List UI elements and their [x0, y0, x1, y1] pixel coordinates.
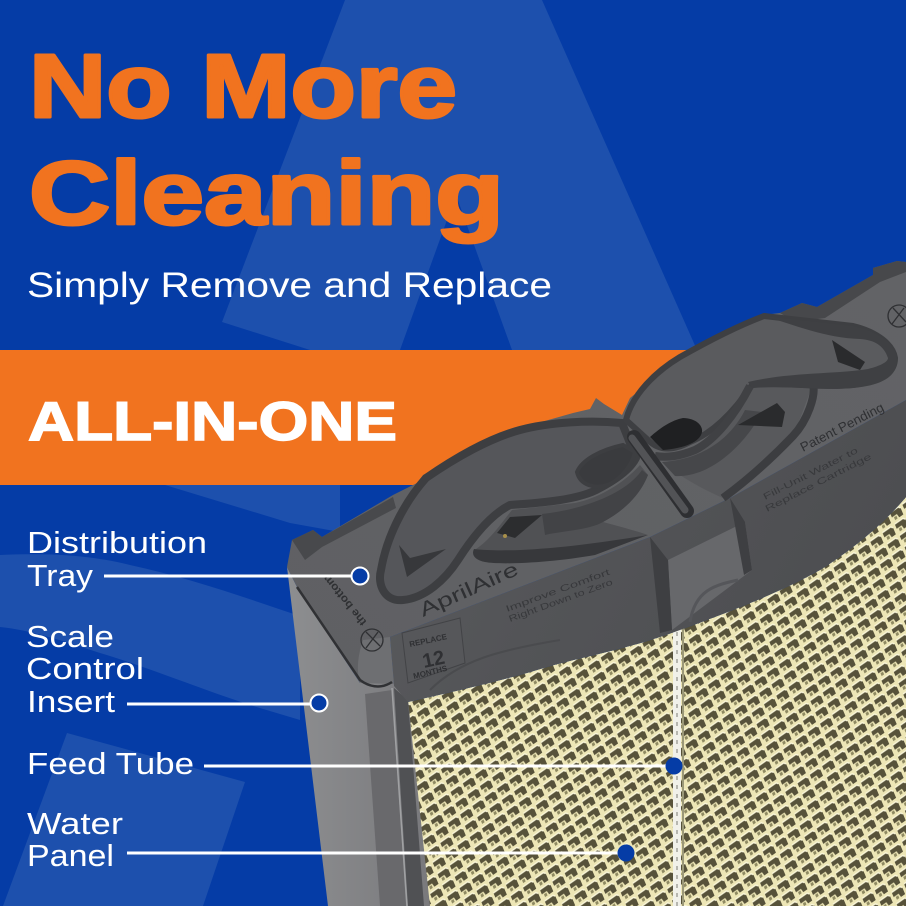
- front face dividers: [430, 498, 752, 690]
- tray rim: [292, 497, 396, 560]
- center opening: [650, 418, 702, 450]
- replace label: 12: [420, 647, 447, 673]
- side frame: [287, 567, 430, 906]
- engraved tray markings: [321, 400, 886, 628]
- tray corner: [358, 637, 394, 684]
- left wing bottom ribbon: [473, 535, 648, 563]
- label: Water Panel: [27, 806, 634, 873]
- right lobe: [626, 316, 895, 448]
- label: Scale Control Insert: [26, 619, 328, 719]
- label: Distribution Tray: Tray: [27, 558, 94, 593]
- engraved tray markings: AprilAire: [416, 558, 522, 622]
- center rod: [632, 437, 687, 511]
- debris openings: [832, 340, 865, 370]
- heading: [29, 37, 504, 244]
- heading: Cleaning: [29, 144, 504, 244]
- label: Water Panel: Panel: [27, 838, 114, 873]
- right wing inner ribbon: [655, 386, 750, 457]
- right wing outer ribbon: [723, 384, 814, 498]
- engraved tray markings: Replace Cartridge: [763, 451, 873, 514]
- background logo shapes: [0, 0, 697, 906]
- replace label: MONTHS: [412, 664, 449, 681]
- right lobe heavy ribbon: [748, 316, 897, 389]
- left lobe debris: [399, 545, 446, 577]
- water panel: [400, 490, 906, 906]
- left lobe: [380, 422, 636, 600]
- engraved tray markings: the bottom: [321, 572, 369, 628]
- feed tube: [673, 628, 684, 906]
- label: Scale Control Insert: Insert: [27, 684, 115, 719]
- distribution tray ribbons: [380, 316, 897, 600]
- product: humidifier cartridge: [287, 261, 906, 906]
- orange band: [0, 350, 700, 485]
- label: Distribution Tray: [27, 525, 368, 593]
- label: Scale Control Insert: Scale: [26, 619, 114, 654]
- engraved tray markings: Fill-Unit Water to: [761, 445, 859, 502]
- right wing: [662, 384, 813, 498]
- replace label: REPLACE: [409, 632, 448, 649]
- icon: scissors left: [361, 629, 383, 651]
- label: Feed Tube: Feed Tube: [27, 746, 194, 781]
- orange band: ALL-IN-ONE: [28, 390, 397, 452]
- engraved tray markings: Patent Pending: [798, 400, 886, 455]
- tray seam: [297, 587, 392, 686]
- engraved tray markings: Improve Comfort: [504, 567, 612, 614]
- engraved tray markings: Right Down to Zero: [507, 577, 614, 624]
- subheading: Simply Remove and Replace: [27, 266, 552, 305]
- heading: No More: [29, 37, 457, 137]
- label: Distribution Tray: Distribution: [27, 525, 207, 560]
- label: Water Panel: Water: [27, 806, 123, 841]
- tray top: [287, 261, 906, 683]
- replace label: [402, 618, 465, 683]
- label: Scale Control Insert: Control: [26, 651, 144, 686]
- small left loop: [577, 445, 635, 487]
- right wing shade: [662, 410, 762, 476]
- label: Feed Tube: [27, 746, 682, 781]
- icon: scissors right: [888, 305, 906, 327]
- left wing: [475, 465, 648, 562]
- left debris: [497, 515, 542, 538]
- tray front face: [390, 400, 906, 702]
- left wing shade: [542, 470, 648, 535]
